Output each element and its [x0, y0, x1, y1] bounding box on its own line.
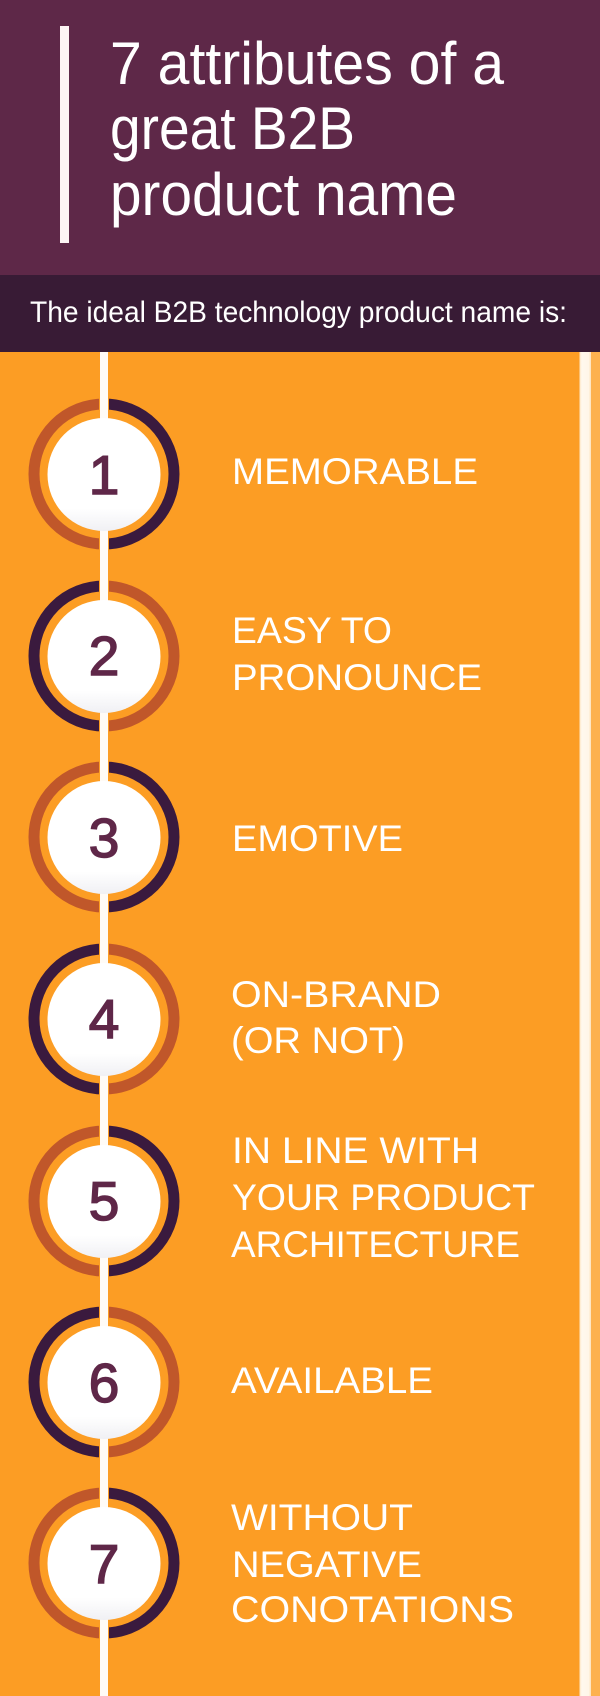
item 4 label: (OR NOT): [231, 1019, 405, 1061]
item 5 label: [231, 1129, 535, 1265]
item 7 badge: [48, 1507, 160, 1620]
item 2 badge: [48, 600, 160, 713]
title: great B2B: [110, 95, 355, 162]
item 7 ring: [34, 1493, 174, 1633]
item 2 label: [232, 609, 482, 698]
item 2 badge: 2: [89, 625, 119, 687]
panel: subtitle band: The ideal B2B technology product name is:: [30, 296, 567, 329]
item 5 label: ARCHITECTURE: [231, 1223, 520, 1265]
item 2 label: EASY TO: [232, 609, 392, 651]
item 7 label: [231, 1496, 514, 1630]
item 1 badge: 1: [89, 444, 119, 506]
item 6 badge: [48, 1326, 160, 1439]
item 5 label: YOUR PRODUCT: [232, 1176, 535, 1218]
title: [110, 30, 505, 228]
item 4 badge: 4: [89, 988, 119, 1050]
item 7 label: NEGATIVE: [232, 1543, 422, 1585]
item 4 label: [231, 973, 441, 1061]
item 5 ring: [34, 1131, 174, 1271]
item 7 badge: 7: [89, 1533, 119, 1595]
title: product name: [110, 161, 457, 228]
item 5 badge: 5: [89, 1170, 119, 1232]
timeline vertical line: [99, 352, 109, 1696]
item 3 ring: [34, 767, 174, 907]
item 1 ring: [34, 404, 174, 544]
item 7 label: CONOTATIONS: [231, 1588, 514, 1630]
item 4 label: ON-BRAND: [231, 973, 441, 1015]
panel: orange background: [0, 352, 600, 1696]
item 4 badge: [48, 963, 160, 1076]
item 1 label: MEMORABLE: [232, 450, 478, 492]
item 3 label: EMOTIVE: [232, 817, 403, 859]
item 6 ring: [34, 1312, 174, 1452]
item 6 badge: 6: [89, 1352, 119, 1414]
panel: header: [0, 0, 600, 275]
item 5 label: IN LINE WITH: [232, 1129, 479, 1171]
item 2 label: PRONOUNCE: [232, 656, 482, 698]
item 4 ring: [34, 949, 174, 1089]
title: 7 attributes of a: [110, 30, 505, 97]
panel: subtitle band: [0, 275, 600, 352]
title accent bar: [60, 26, 69, 243]
item 3 badge: 3: [89, 807, 119, 869]
item 1 badge: [48, 418, 160, 531]
item 2 ring: [34, 586, 174, 726]
item 6 label: AVAILABLE: [231, 1359, 433, 1401]
item 3 badge: [48, 781, 160, 894]
item 5 badge: [48, 1145, 160, 1258]
item 7 label: WITHOUT: [231, 1496, 413, 1538]
